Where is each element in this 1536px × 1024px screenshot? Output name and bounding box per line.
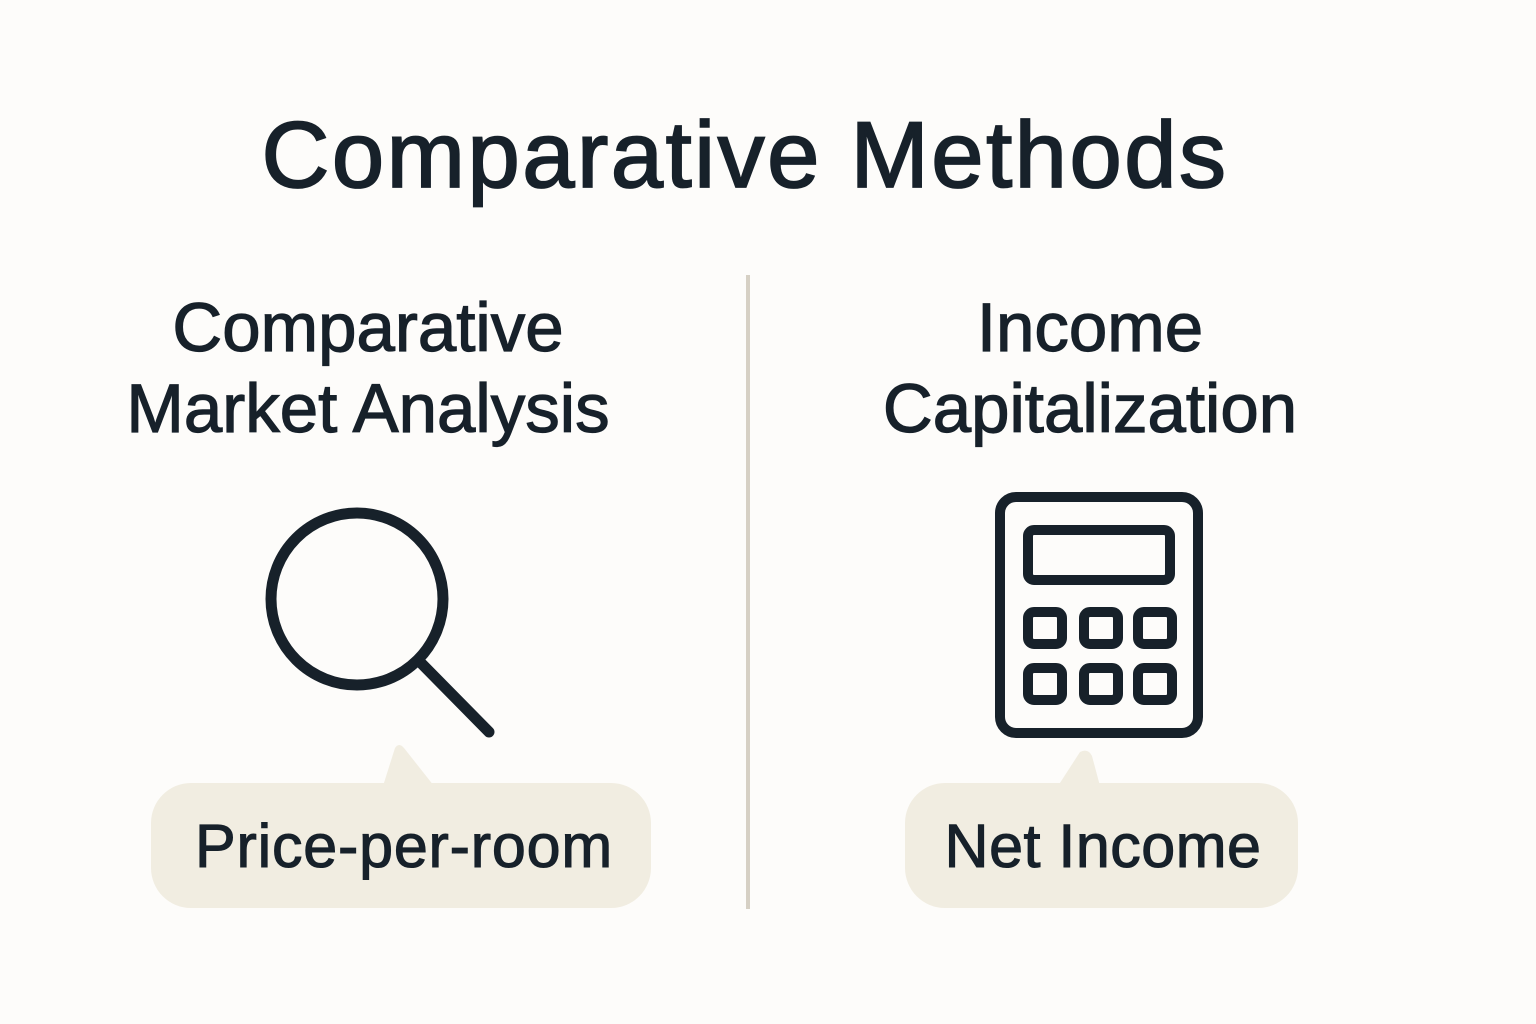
divider — [746, 275, 750, 909]
heading: comparative market analysis: Market Analysis — [126, 370, 610, 447]
heading: income capitalization: Income — [977, 289, 1203, 366]
icon: magnifying glass — [271, 513, 489, 732]
heading: comparative market analysis: Comparative — [172, 289, 564, 366]
callout: price-per-room — [151, 745, 651, 908]
heading: income capitalization — [883, 289, 1297, 448]
heading: income capitalization: Capitalization — [883, 370, 1297, 447]
callout: net income — [905, 751, 1298, 908]
icon: calculator — [1000, 497, 1198, 733]
title: Comparative Methods — [261, 102, 1229, 207]
heading: comparative market analysis — [126, 289, 610, 448]
callout: net income: Net Income — [945, 812, 1261, 880]
callout: price-per-room: Price-per-room — [195, 812, 613, 880]
